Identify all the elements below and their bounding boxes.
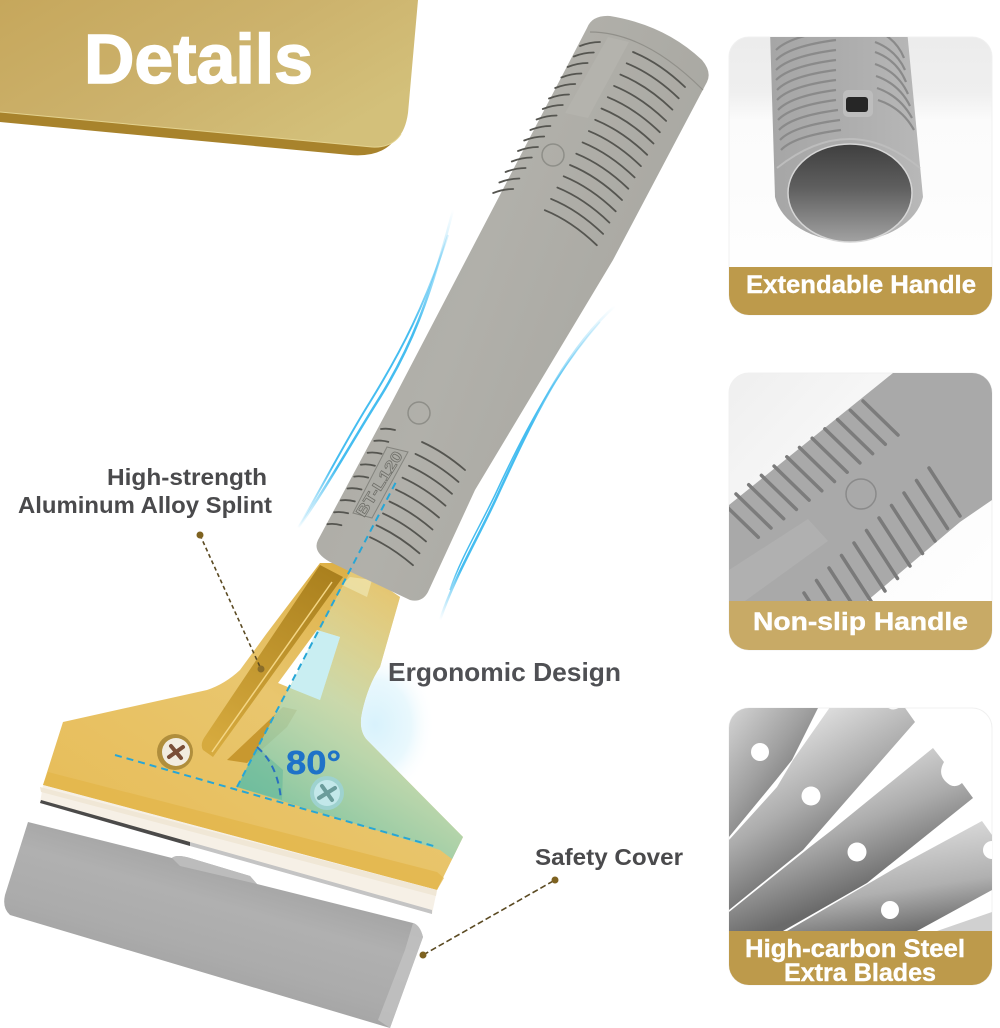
overlay: teal angle highlight <box>237 572 463 859</box>
blade 3 <box>729 748 973 931</box>
slot: central white window <box>278 630 340 700</box>
banner: gold Details tab <box>0 0 418 155</box>
label band <box>729 267 992 315</box>
angle label: 80 degrees: 80° <box>286 744 341 781</box>
callout: aluminum alloy splint <box>18 464 272 518</box>
callout: safety cover: Safety Cover <box>535 844 683 870</box>
blade 1 <box>729 700 822 837</box>
model plate: BT-L120: BT-L120 <box>353 448 407 520</box>
callout: aluminum alloy splint: Aluminum Alloy Splint <box>18 492 272 518</box>
slot: top small window <box>342 577 372 597</box>
motion lines: blue speed strokes <box>291 210 615 620</box>
slot: long window in head <box>202 565 343 757</box>
label text: Non-slip Handle <box>753 608 968 636</box>
scraper head: gold body <box>43 563 463 890</box>
grip slots: lower left <box>327 429 395 525</box>
heading: Details: Details <box>84 20 313 98</box>
panel: extendable handle <box>729 30 992 315</box>
tube opening <box>788 144 912 242</box>
leader: safety cover <box>420 876 558 958</box>
screw: left <box>157 734 193 770</box>
blade 5 <box>937 912 992 931</box>
cover tab <box>172 856 257 884</box>
blade 2 <box>729 700 915 910</box>
glow: blue haze behind head <box>315 650 435 800</box>
slot: lower window <box>227 707 297 763</box>
label text: High-carbon Steel <box>745 935 965 963</box>
callout: ergonomic design: Ergonomic Design <box>388 657 621 687</box>
blade 4 <box>787 821 1000 931</box>
safety cover: grey guard <box>4 822 423 1028</box>
angle guides: dashed lines and arc <box>115 480 437 847</box>
tube: hollow handle end <box>770 30 923 242</box>
grip slots: upper left <box>493 42 600 193</box>
handle close-up <box>729 373 992 601</box>
label plate: upper <box>565 37 629 118</box>
screw: right <box>310 776 344 810</box>
handle: grey grip <box>316 16 709 601</box>
panel: extra blades <box>729 700 1000 987</box>
callout: aluminum alloy splint: High-strength <box>107 464 267 490</box>
model plate: BT-L120 <box>353 447 408 520</box>
grip slots: upper right <box>545 52 685 245</box>
leader: aluminum splint <box>196 532 264 672</box>
label text <box>745 935 965 987</box>
circle mark: upper <box>542 144 564 166</box>
label band <box>729 601 992 650</box>
label text: Extendable Handle <box>746 271 976 299</box>
label band <box>729 931 992 985</box>
circle mark: lower <box>408 402 430 424</box>
blade: exposed steel blade <box>40 785 437 914</box>
grip slots: lower right <box>370 442 465 565</box>
panel: non-slip handle <box>723 373 992 650</box>
label text: Extra Blades <box>784 959 936 987</box>
